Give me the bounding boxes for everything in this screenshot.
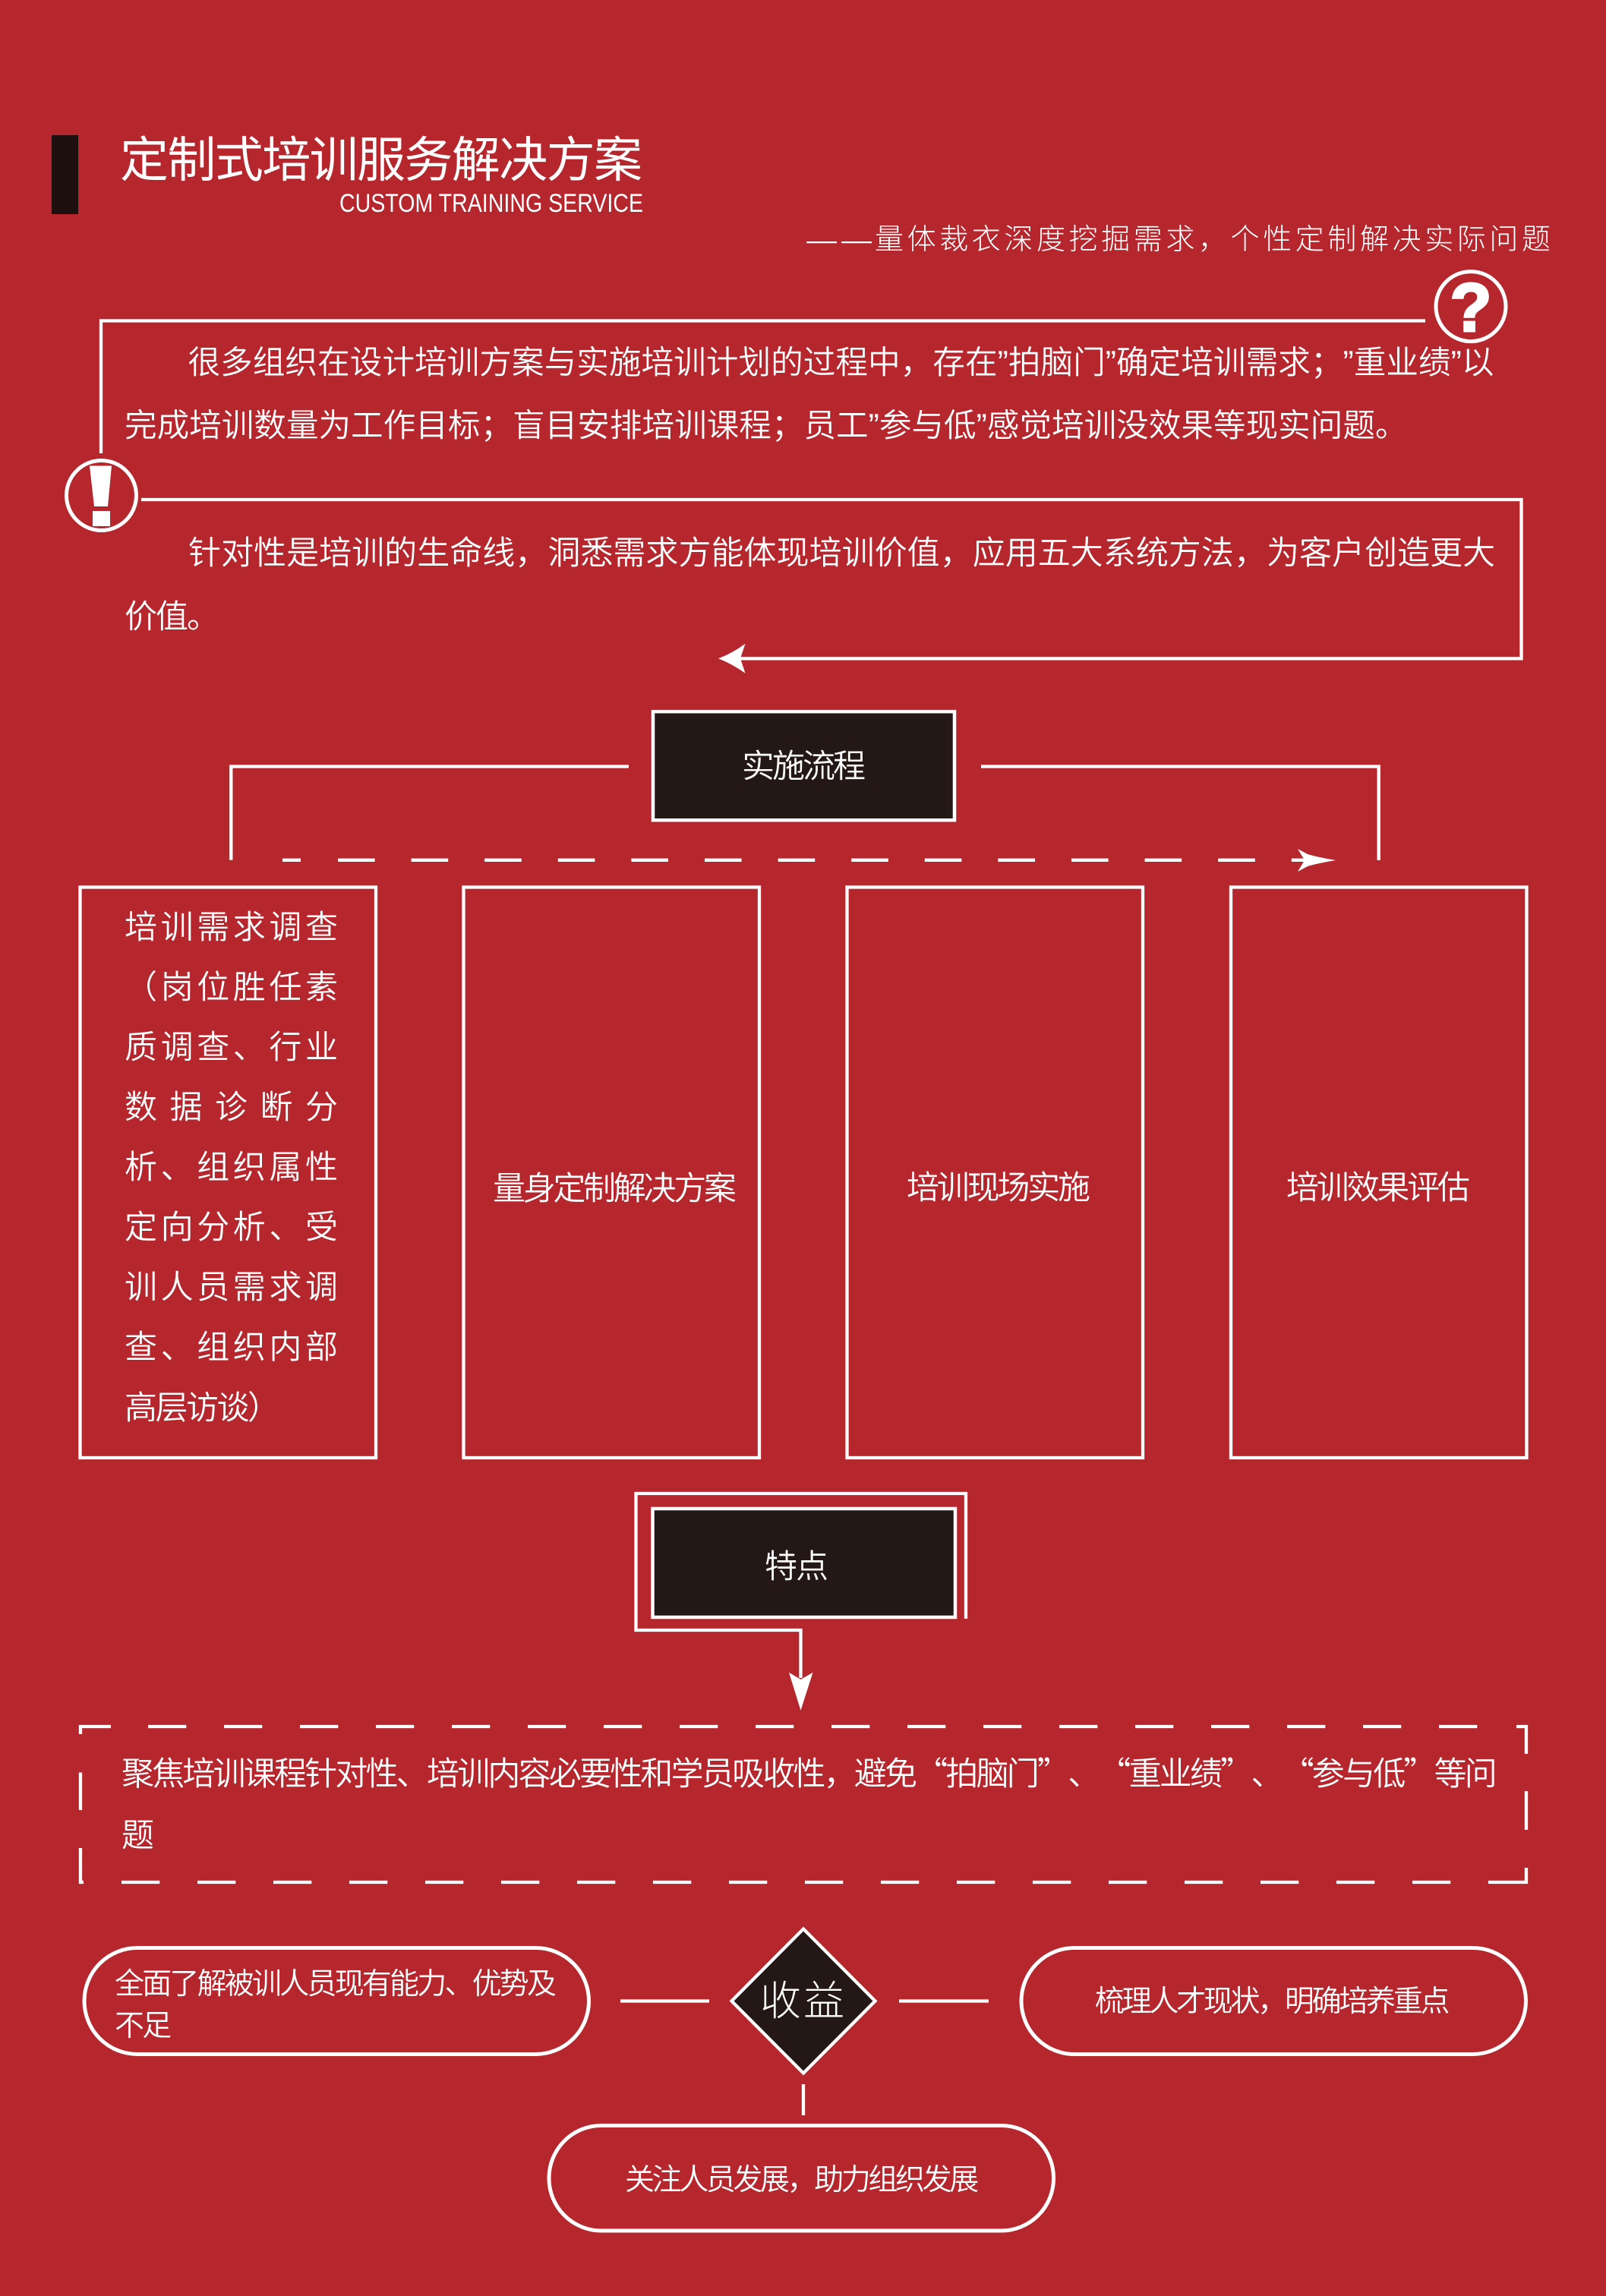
panel: solution statement (67, 460, 1522, 673)
features text: 题 (121, 1809, 154, 1856)
arrow: process direction (1298, 849, 1336, 872)
arrow: features to description (636, 1493, 966, 1711)
panel: step 3 on-site delivery (847, 887, 1143, 1458)
connector: below benefits (802, 2084, 805, 2115)
icon: question mark: ? (1450, 270, 1491, 346)
benefit pill: talent status (1021, 1948, 1526, 2055)
benefits diamond (732, 1929, 875, 2073)
panel: step 1 survey: 查、组织内部 (125, 1321, 342, 1368)
problem frame line (101, 320, 1425, 453)
panel: step 2 custom plan: 量身定制解决方案 (493, 1162, 736, 1210)
icon: exclamation mark (67, 460, 137, 530)
english subtitle: CUSTOM TRAINING SERVICE (339, 189, 643, 218)
panel: step 2 custom plan (463, 887, 759, 1458)
features text (121, 1748, 1495, 1856)
solution text: 针对性是培训的生命线，洞悉需求方能体现培训价值，应用五大系统方法，为客户创造更大 (188, 527, 1495, 574)
title: 定制式培训服务解决方案 (120, 121, 642, 191)
panel: problem statement (101, 270, 1506, 453)
tagline: — (805, 210, 838, 264)
benefits diamond: 收益 (760, 1967, 847, 2027)
panel: step 3 on-site delivery: 培训现场实施 (907, 1162, 1090, 1209)
panel: step 1 survey: 析、组织属性 (125, 1141, 342, 1188)
panel: features heading (653, 1509, 955, 1617)
dashed frame (80, 1727, 1526, 1882)
panel: step 1 survey: 培训需求调查 (125, 901, 342, 948)
title accent bar (52, 135, 78, 214)
panel: features description (80, 1727, 1526, 1882)
panel: step 1 survey (80, 887, 376, 1458)
panel: process heading (653, 711, 954, 820)
problem text: 很多组织在设计培训方案与实施培训计划的过程中，存在”拍脑门”确定培训需求；”重业绩”以 (188, 345, 1494, 381)
solution text (125, 527, 1495, 638)
problem text (125, 345, 1494, 444)
panel: step 1 survey: 定向分析、受 (125, 1201, 342, 1248)
panel: step 1 survey: （岗位胜任素 (125, 961, 342, 1008)
tagline: 量体裁衣深度挖掘需求，个性定制解决实际问题 (875, 216, 1554, 257)
icon: question mark (1436, 270, 1506, 346)
benefit pill: development (549, 2126, 1054, 2231)
process connector lines (231, 767, 1379, 860)
panel: step 4 evaluation (1231, 887, 1526, 1458)
benefit pill: understand trainees: 不足 (115, 2002, 171, 2045)
connector: left of benefits (620, 1999, 709, 2003)
benefit pill: understand trainees: 全面了解被训人员现有能力、优势及 (115, 1960, 556, 2003)
benefit pill: talent status: 梳理人才现状，明确培养重点 (1095, 1978, 1448, 2020)
solution frame line (141, 500, 1522, 658)
panel: step 1 survey: 数据诊断分 (125, 1081, 351, 1128)
tagline (805, 210, 1554, 264)
solution text: 价值。 (125, 591, 218, 638)
panel: process heading: 实施流程 (742, 740, 865, 787)
benefit pill: understand trainees (84, 1948, 589, 2055)
panel: step 1 survey: 质调查、行业 (125, 1021, 342, 1068)
panel: step 4 evaluation: 培训效果评估 (1286, 1162, 1469, 1209)
panel: step 1 survey: 高层访谈） (125, 1382, 278, 1429)
panel: step 1 survey: 训人员需求调 (125, 1261, 342, 1308)
features text: 聚焦培训课程针对性、培训内容必要性和学员吸收性，避免“拍脑门”、“重业绩”、“参与低”等问 (121, 1748, 1495, 1795)
arrow: to process (718, 644, 746, 673)
benefit pill: development: 关注人员发展，助力组织发展 (625, 2156, 978, 2199)
header: title block (52, 121, 643, 218)
tagline: — (840, 210, 873, 264)
problem text: 完成培训数量为工作目标；盲目安排培训课程；员工”参与低”感觉培训没效果等现实问题。 (125, 408, 1408, 444)
panel: features heading: 特点 (765, 1541, 827, 1588)
connector: right of benefits (899, 1999, 989, 2003)
